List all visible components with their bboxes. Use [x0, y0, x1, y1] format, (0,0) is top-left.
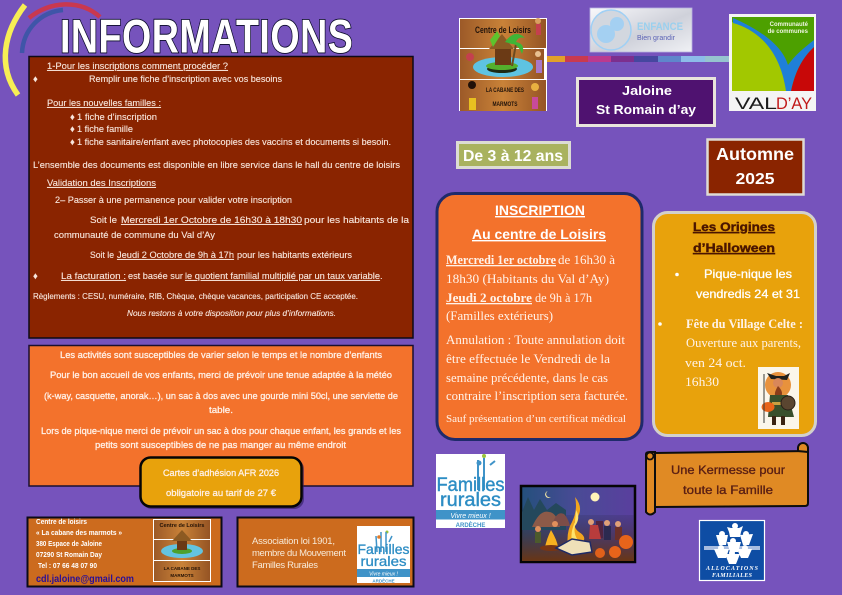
documents list: 1 fiche famille — [77, 123, 133, 134]
panel: association: Association loi 1901, — [252, 536, 335, 547]
logo: Centre de loisirs — [459, 18, 547, 111]
panel heading — [472, 202, 606, 242]
picnic bullet: Pique-nique les — [704, 267, 792, 281]
Celtic village bullet: Fête du Village Celte : — [686, 316, 803, 331]
season box: Automne — [716, 144, 794, 164]
scroll banner: kermesse: Une Kermesse pour — [671, 463, 785, 477]
logo: Val d'Ay: D’AY — [776, 94, 812, 113]
documents availability note: L’ensemble des documents est disponible en libre service dans le hall du centre de loisirs — [33, 159, 400, 170]
Halloween heading: Les Origines — [693, 220, 775, 234]
documents list: ♦ — [70, 123, 75, 134]
logo: Familles rurales small: Vivre mieux ! — [369, 572, 399, 578]
logo: Allocations familiales: FAMILIALES — [712, 573, 753, 579]
heading: how to register: 1-Pour les inscriptions comment procéder ? — [47, 60, 228, 71]
permanence dates: other residents: pour les habitants extérieurs — [237, 249, 352, 260]
panel: association — [238, 518, 414, 586]
logo: Val d'Ay: VAL — [735, 94, 777, 113]
small centre logo — [153, 519, 211, 582]
logo: Familles rurales small: Familles — [358, 541, 410, 557]
age range box — [458, 142, 570, 168]
permanence dates: Val d'Ay residents: communauté de commune du Val d’Ay — [54, 229, 215, 240]
panel heading: INSCRIPTION — [495, 202, 585, 218]
panel: activities advice: Lors de pique-nique merci de prévoir un sac à dos pour chaque enfant, les grands et les — [41, 426, 401, 437]
dates: Jeudi 2 octobre — [446, 290, 532, 305]
icon: viking with pumpkin — [758, 367, 799, 429]
Celtic village bullet: 16h30 — [685, 374, 719, 389]
logo: Enfance: ENFANCE — [637, 21, 683, 33]
logo: Familles rurales: Vivre mieux ! — [450, 513, 491, 520]
permanence dates: other residents — [90, 249, 352, 260]
panel: activities advice: Les activités sont susceptibles de varier selon le temps et le nombre d’enfants — [60, 350, 382, 361]
picnic bullet — [675, 267, 800, 301]
small centre logo: Centre de Loisirs — [160, 523, 204, 529]
logo: Familles rurales small — [357, 526, 410, 584]
cancellation policy: être effectuée le Vendredi de la — [446, 351, 610, 366]
panel: activities advice — [29, 346, 413, 486]
heading: validation: Validation des Inscriptions — [47, 177, 156, 188]
cancellation policy: Sauf présentation d’un certificat médical — [446, 413, 626, 425]
permanence dates: other residents: Jeudi 2 Octobre de 9h à 17h — [117, 249, 234, 260]
panel: association: membre du Mouvement — [252, 548, 346, 559]
Celtic village bullet: ven 24 oct. — [685, 355, 746, 370]
location box — [578, 78, 714, 126]
panel: contact: Tel : 07 66 48 07 90 — [38, 561, 97, 570]
location box: St Romain d’ay — [596, 102, 697, 117]
panel: inscription dates — [437, 194, 642, 440]
bullet step 1: ♦ — [33, 73, 38, 84]
permanence dates: other residents: Soit le — [90, 249, 114, 260]
Celtic village bullet: Ouverture aux parents, — [686, 335, 801, 350]
logo: Val d'Ay — [729, 14, 816, 113]
title: INFORMATIONS — [60, 11, 353, 64]
heading: new families: Pour les nouvelles familles : — [47, 97, 161, 108]
dates: Mercredi 1er octobre — [446, 252, 556, 267]
documents list: ♦ — [70, 111, 75, 122]
cancellation policy — [446, 332, 628, 425]
logo: Centre de loisirs: Centre de Loisirs — [475, 25, 531, 35]
billing: ♦ — [33, 270, 38, 281]
logo: Enfance — [590, 8, 692, 52]
billing: est basée sur — [128, 270, 183, 281]
panel: contact: 380 Espace de Jaloine — [36, 539, 102, 548]
billing: La facturation : — [61, 270, 126, 281]
logo: Familles rurales: ARDÈCHE — [456, 521, 485, 529]
dates — [446, 252, 615, 323]
logo: Centre de loisirs: LA CABANE DES — [486, 87, 524, 94]
bullet step 1: Remplir une fiche d’inscription avec vos besoins — [89, 73, 282, 84]
dates: 18h30 (Habitants du Val d’Ay) — [446, 271, 609, 286]
panel: contact: « La cabane des marmots » — [36, 528, 122, 537]
scroll banner: kermesse: toute la Famille — [683, 483, 773, 497]
Celtic village bullet — [658, 316, 803, 389]
logo: Familles rurales — [436, 454, 505, 529]
cancellation policy: Annulation : Toute annulation doit — [446, 332, 625, 347]
panel: contact — [28, 517, 222, 586]
panel: activities advice: table. — [209, 405, 233, 416]
dates: de 16h30 à — [558, 252, 615, 267]
panel: activities advice: petits sont susceptibles de ne pas manger au même endroit — [95, 440, 346, 451]
documents list: 1 fiche sanitaire/enfant avec photocopies des vaccins et documents si besoin. — [77, 136, 391, 147]
panel: activities advice: Pour le bon accueil de vos enfants, merci de prévoir une tenue adaptée à la météo — [50, 370, 392, 381]
panel: association: Familles Rurales — [252, 560, 318, 571]
permanence dates: Val d'Ay residents: Soit le — [90, 214, 117, 225]
season box: 2025 — [736, 171, 775, 188]
callout: membership card: Cartes d’adhésion AFR 2026 — [163, 468, 279, 479]
logo: Familles rurales small: ARDÈCHE — [372, 576, 395, 584]
permanence dates: Val d'Ay residents — [54, 214, 410, 240]
email: cdl.jaloine@gmail.com — [36, 573, 134, 585]
logo: Familles rurales: Familles — [436, 475, 504, 496]
logo: Allocations familiales — [700, 520, 764, 580]
cancellation policy: semaine précédente, dans le cas — [446, 370, 608, 385]
logo: Enfance: Bien grandir — [637, 35, 676, 42]
panel: contact: Centre de loisirs — [36, 517, 87, 526]
documents list: 1 fiche d’inscription — [77, 111, 157, 122]
location box: Jaloine — [622, 83, 672, 98]
Halloween heading: d’Halloween — [693, 241, 775, 255]
age range box: De 3 à 12 ans — [463, 148, 563, 165]
logo: Centre de loisirs: MARMOTS — [492, 101, 518, 108]
documents list: ♦ — [70, 136, 75, 147]
illustration: Halloween campfire — [521, 486, 635, 562]
panel: inscription procedure — [29, 56, 413, 338]
Halloween heading — [693, 220, 775, 255]
logo: Val d'Ay: de communes — [768, 29, 809, 35]
callout: membership card — [140, 458, 304, 509]
dates: (Familles extérieurs) — [446, 308, 553, 323]
logo: Familles rurales small: rurales — [360, 553, 406, 569]
season box — [708, 140, 804, 194]
scroll banner: kermesse — [646, 443, 808, 514]
payment methods: Règlements : CESU, numéraire, RIB, Chèque, chèque vacances, participation CE acceptée. — [33, 291, 358, 301]
callout: membership card: obligatoire au tarif de 27 € — [166, 488, 277, 499]
decorative title arcs — [5, 4, 100, 95]
billing: . — [380, 270, 383, 281]
permanence dates: Val d'Ay residents: Mercredi 1er Octobre de 16h30 à 18h30 — [121, 214, 302, 225]
logo: Familles rurales: rurales — [440, 490, 501, 511]
small centre logo: MARMOTS — [170, 573, 194, 578]
logo: Allocations familiales: ALLOCATIONS — [705, 566, 759, 572]
step 2: 2– Passer à une permanence pour valider votre inscription — [55, 194, 292, 205]
dates: de 9h à 17h — [535, 290, 592, 305]
permanence dates: Val d'Ay residents: pour les habitants de la — [304, 214, 410, 225]
colored connector bar — [547, 56, 729, 62]
billing — [33, 270, 383, 281]
picnic bullet: vendredis 24 et 31 — [696, 287, 800, 301]
closing note: Nous restons à votre disposition pour plus d’informations. — [127, 309, 336, 318]
documents list — [70, 111, 391, 147]
logo: Val d'Ay: Communauté — [770, 22, 809, 28]
small centre logo: LA CABANE DES — [164, 566, 200, 571]
panel: Halloween — [654, 212, 816, 436]
cancellation policy: contraire l’inscription sera facturée. — [446, 388, 628, 403]
panel: activities advice: (k-way, casquette, anorak…), un sac à dos avec une gourde mini 50cl, une serviette de — [44, 391, 398, 402]
panel heading: Au centre de Loisirs — [472, 226, 606, 242]
panel: contact: 07290 St Romain Day — [36, 550, 103, 559]
billing: le quotient familial multiplié par un taux variable — [185, 270, 380, 281]
